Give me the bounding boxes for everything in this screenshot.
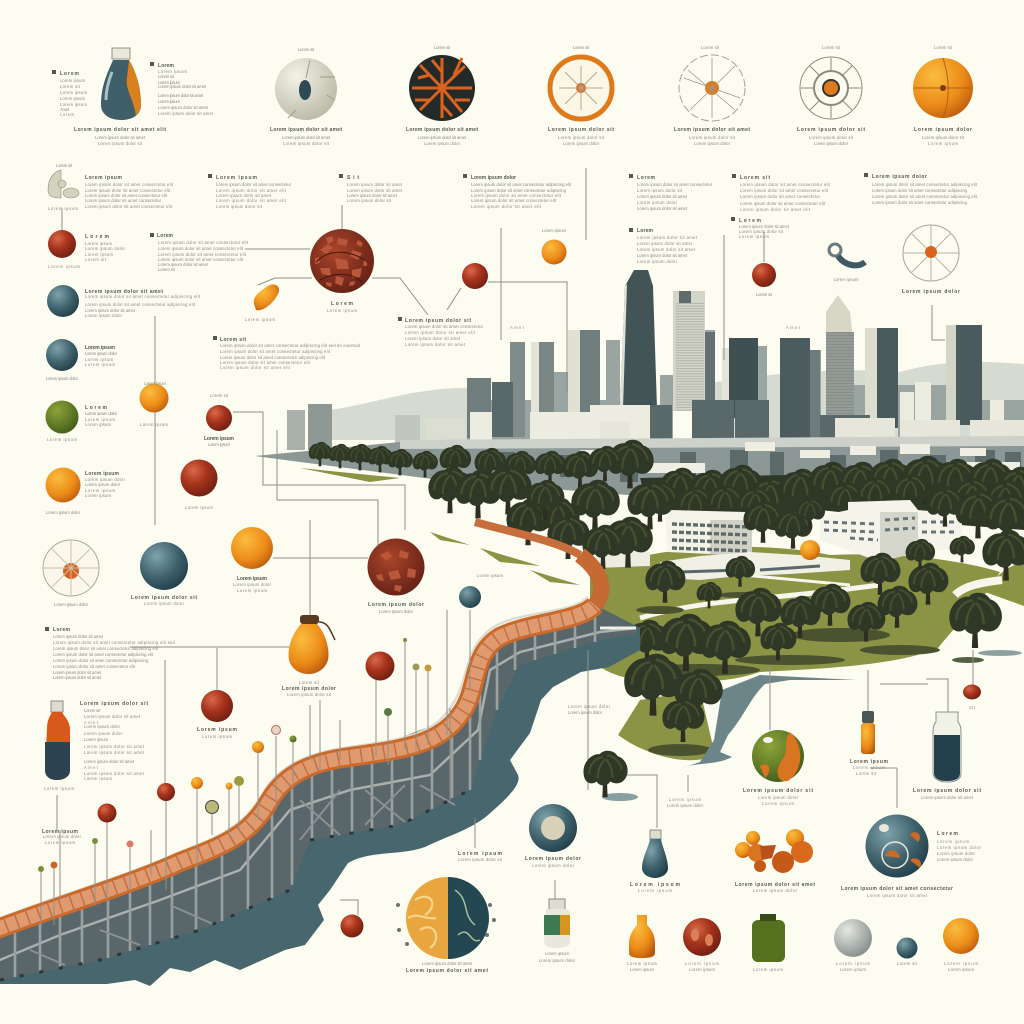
icon: fine line orbit diagram: [679, 55, 745, 121]
text blocks top row: Lorem sit: [822, 45, 841, 50]
rear tree band: [309, 440, 1024, 530]
white campus buildings: [596, 500, 962, 580]
icon: orange and navy test bottle: [45, 701, 70, 780]
text blocks left column: Lorem sit: [85, 257, 107, 262]
icon: pale cracked sphere: [275, 58, 337, 120]
text blocks second row: Lorem ipsum dolor: [471, 175, 516, 181]
text blocks second row: Lorem ipsum dolor sit amet elit: [740, 207, 811, 212]
text blocks second row: Lorem sit: [740, 175, 770, 181]
lawn: [300, 468, 1024, 760]
text blocks lower right: Lorem ipsum: [669, 797, 702, 802]
icon: organelle globe: [866, 814, 928, 878]
text blocks centre: Lorem ipsum dolor sit amet consectetur adipiscing elit sed do eiusmod: [220, 343, 361, 348]
distant hills: [330, 362, 1024, 440]
text blocks lower right: Lorem ipsum dolor sit: [458, 857, 503, 862]
text blocks centre: Lorem ipsum dolor: [379, 609, 414, 614]
icon: orange vial: [861, 711, 875, 754]
text blocks second row: Lorem ipsum dolor sit: [637, 188, 683, 193]
text blocks lower right: Lorem sit: [856, 771, 877, 776]
text blocks second row: Lorem: [637, 175, 656, 181]
text blocks top row: Lorem ipsum dolor sit amet: [674, 127, 750, 133]
text blocks top row: Lorem ipsum dolor sit amet: [158, 93, 204, 98]
text blocks lower right: Lorem ipsum dolor: [753, 888, 798, 893]
text blocks centre: Lorem ipsum: [197, 727, 238, 733]
text blocks left column: Lorem: [157, 233, 174, 239]
text blocks lower left: Lorem ipsum dolor sit amet: [84, 750, 145, 755]
text blocks second row: Lorem ipsum dolor sit amet: [637, 206, 688, 211]
text blocks lower right: Lorem ipsum dolor: [525, 856, 581, 862]
text blocks lower right: Lorem ipsum: [627, 961, 658, 966]
mid spheres: [140, 384, 481, 722]
icon: dark sphere with orange veins: [409, 55, 475, 121]
text blocks centre: [131, 228, 960, 739]
lawn paths and shadows: [636, 570, 1022, 768]
text blocks centre: Lorem ipsum dolor sit amet elit: [220, 365, 291, 370]
text blocks left column: [46, 233, 249, 607]
text blocks lower left: Lorem ipsum dolor: [43, 834, 82, 839]
icon: navy jar: [933, 712, 961, 782]
icon: orange ring diagram: [550, 57, 612, 119]
bridge trestle: [0, 605, 636, 985]
text blocks second row: Lorem ipsum dolor: [637, 259, 678, 264]
text blocks centre: Lorem ipsum dolor: [368, 602, 424, 608]
text blocks lower right: Lorem ipsum dolor: [937, 845, 982, 850]
text blocks lower right: Lorem ipsum dolor: [568, 710, 603, 715]
text blocks centre: Lorem ipsum dolor sit: [287, 692, 332, 697]
text blocks top row: Lorem ipsum dolor sit: [922, 135, 965, 140]
text blocks top row: [52, 45, 972, 146]
text blocks top row: Lorem ipsum dolor sit amet: [406, 127, 478, 133]
text blocks lower right: Lorem ipsum dolor sit amet: [735, 882, 815, 888]
text blocks centre: Lorem ipsum dolor sit: [405, 318, 471, 324]
text blocks top row: Lorem ipsum dolor sit amet: [158, 111, 214, 116]
text blocks centre: Lorem ipsum: [144, 381, 166, 386]
text blocks centre: Lorem ipsum: [237, 576, 268, 582]
text blocks centre: Lorem ipsum: [140, 422, 168, 427]
connector lines: [57, 168, 973, 915]
text blocks top row: Lorem ipsum: [60, 102, 88, 107]
text blocks second row: Lorem ipsum dolor sit amet: [637, 247, 696, 252]
text blocks lower left: Lorem: [53, 627, 71, 633]
text blocks second row: Lorem ipsum: [48, 206, 78, 211]
text blocks lower right: Lorem ipsum: [937, 839, 970, 844]
distant urban haze band: [255, 436, 1024, 496]
text blocks lower right: Lorem ipsum: [853, 765, 886, 770]
text blocks left column: Lorem ipsum dolor sit amet consectetur elit: [158, 252, 247, 257]
text blocks top row: Lorem ipsum dolor sit amet: [95, 135, 146, 140]
text blocks lower right: Lorem ipsum dolor sit amet: [921, 795, 974, 800]
text blocks lower left: Lorem ipsum dolor sit amet: [84, 771, 145, 776]
text blocks centre: Lorem ipsum dolor: [233, 582, 272, 587]
text blocks top row: Lorem ipsum dolor sit amet: [282, 135, 331, 140]
text blocks second row: Lorem ipsum dolor sit amet: [739, 224, 790, 229]
text blocks second row: Lorem ipsum dolor sit amet consectetur adipiscing: [872, 200, 968, 205]
text blocks lower left: Lorem sit: [84, 708, 101, 713]
text blocks left column: Lorem ipsum: [85, 362, 116, 367]
text blocks lower left: Lorem ipsum: [44, 786, 74, 791]
icon: teal flask: [642, 830, 668, 878]
text blocks second row: Lorem ipsum dolor sit amet consectetur elit: [85, 182, 174, 187]
text blocks second row: Lorem ipsum dolor sit amet consectetur adipiscing: [872, 188, 968, 193]
text blocks lower right: Lorem ipsum: [840, 967, 866, 972]
text blocks second row: Lorem ipsum dolor sit amet consectetur adipiscing elit: [872, 182, 978, 187]
text blocks left column: Lorem ipsum: [85, 345, 116, 351]
lower right spheres and nut: [340, 684, 981, 938]
text blocks left column: Lorem ipsum dolor: [54, 602, 89, 607]
text blocks top row: Lorem ipsum: [158, 99, 180, 104]
text blocks lower right: Lorem ipsum dolor: [539, 958, 576, 963]
text blocks left column: Lorem ipsum dolor sit amet: [158, 262, 209, 267]
text blocks lower left: Lorem ipsum dolor sit amet: [53, 634, 104, 639]
text blocks centre: Lorem ipsum: [208, 442, 230, 447]
text blocks lower left: Lorem ipsum dolor sit amet: [53, 675, 102, 680]
text blocks lower right: Lorem ipsum: [630, 967, 654, 972]
bottom row icons: [629, 914, 979, 962]
text blocks second row: Lorem ipsum dolor: [872, 174, 927, 180]
text blocks left column: Lorem ipsum dolor sit amet consectetur elit: [158, 257, 244, 262]
text blocks top row: Lorem ipsum: [158, 69, 188, 74]
text blocks lower left: Lorem ipsum dolor sit amet consectetur adipiscing elit sed: [53, 640, 176, 645]
text blocks top row: Lorem: [158, 63, 175, 69]
text blocks top row: Lorem ipsum dolor sit amet elit: [74, 127, 166, 133]
text blocks lower right: Lorem: [937, 831, 959, 837]
text blocks lower left: Lorem ipsum: [45, 840, 76, 845]
text blocks second row: Lorem ipsum dolor sit amet consectetur: [216, 182, 292, 187]
text blocks lower left: Lorem ipsum dolor sit amet consectetur adipiscing: [53, 658, 149, 663]
text blocks second row: Lorem ipsum dolor sit amet: [637, 241, 693, 246]
text blocks lower right: Lorem ipsum dolor: [667, 803, 704, 808]
text blocks left column: Lorem ipsum: [85, 422, 112, 427]
text blocks top row: Lorem ipsum: [60, 96, 86, 101]
text blocks centre: Lorem ipsum dolor sit amet: [405, 342, 466, 347]
text blocks top row: Lorem ipsum: [60, 78, 86, 83]
text blocks second row: Lorem ipsum dolor sit amet: [637, 235, 698, 240]
text blocks top row: Lorem: [60, 112, 74, 117]
text blocks lower right: [406, 704, 982, 974]
text blocks lower right: Lorem ipsum dolor sit amet consectetur: [841, 886, 953, 892]
text blocks centre: Lorem ipsum dolor sit amet elit: [405, 330, 476, 335]
text blocks second row: Lorem ipsum dolor sit amet consectetur elit: [740, 182, 831, 187]
text blocks top row: Lorem ipsum dolor sit: [283, 141, 330, 146]
text blocks left column: Lorem ipsum dolor: [85, 313, 123, 318]
text blocks centre: Lorem ipsum: [237, 588, 268, 593]
text blocks left column: Lorem ipsum dolor: [46, 376, 79, 381]
text blocks lower right: Lorem sit: [897, 961, 918, 966]
text blocks centre: Lorem ipsum: [202, 734, 232, 739]
text blocks lower right: Lorem ipsum dolor: [937, 851, 976, 856]
sphere column left: [43, 230, 99, 596]
text blocks top row: Lorem sit: [158, 74, 175, 79]
text blocks lower left: Lorem ipsum dolor sit amet consectetur elit: [53, 664, 136, 669]
text blocks top row: Lorem sit: [434, 45, 451, 50]
large textured brown sphere: [310, 229, 374, 293]
text blocks top row: Lorem ipsum dolor sit: [558, 135, 605, 140]
text blocks top row: Lorem ipsum: [928, 141, 958, 146]
text blocks left column: Lorem sit: [158, 267, 176, 272]
text blocks second row: Lorem ipsum dolor sit amet consectetur elit: [740, 201, 826, 206]
icon: chain link: [829, 244, 865, 265]
text blocks lower left: [42, 627, 176, 845]
text blocks top row: Lorem ipsum dolor sit: [797, 127, 865, 133]
text blocks lower left: Lorem ipsum: [84, 737, 108, 742]
text blocks second row: Sit: [347, 175, 359, 181]
text blocks centre: Lorem ipsum dolor sit amet: [405, 336, 461, 341]
text blocks centre: Lorem ipsum dolor: [144, 601, 185, 606]
text blocks lower right: Lorem ipsum dolor sit amet: [406, 968, 488, 974]
text blocks second row: Lorem ipsum dolor sit amet consectetur: [637, 182, 713, 187]
text blocks centre: Lorem ipsum: [542, 228, 566, 233]
text blocks centre: Lorem ipsum dolor sit amet consectetur adipiscing elit: [220, 355, 326, 360]
icon: green pill jar: [544, 899, 570, 948]
text blocks centre: Lorem ipsum: [327, 308, 358, 313]
text blocks second row: Lorem ipsum dolor sit amet: [347, 188, 403, 193]
text blocks lower left: Lorem ipsum: [42, 829, 79, 835]
text blocks lower right: Lorem ipsum: [850, 759, 889, 765]
text blocks second row: Lorem sit: [56, 163, 73, 168]
text blocks second row: Lorem ipsum dolor sit amet: [347, 182, 403, 187]
text blocks centre: Lorem ipsum dolor sit amet consectetur: [405, 324, 484, 329]
text blocks lower right: Lorem ipsum: [948, 967, 974, 972]
text blocks top row: Lorem ipsum dolor sit amet: [418, 135, 467, 140]
text blocks top row: Lorem sit: [60, 84, 81, 89]
text blocks lower left: Lorem ipsum dolor sit amet: [53, 670, 102, 675]
text blocks centre: Lorem ipsum dolor: [282, 686, 336, 692]
text blocks left column: Lorem ipsum: [85, 471, 120, 477]
text blocks top row: Lorem ipsum dolor: [563, 141, 600, 146]
text blocks lower right: Lorem ipsum dolor sit: [743, 788, 813, 794]
text blocks lower right: Sit: [969, 705, 976, 710]
text blocks top row: Amet: [60, 107, 70, 112]
text blocks second row: Lorem ipsum dolor sit amet: [347, 193, 398, 198]
text blocks left column: Lorem ipsum dolor: [46, 510, 81, 515]
text blocks second row: Lorem ipsum dolor sit amet elit: [216, 188, 287, 193]
text blocks left column: Lorem ipsum: [47, 437, 78, 442]
text blocks centre: Lorem sit: [210, 393, 229, 398]
text blocks top row: Lorem ipsum dolor: [424, 141, 461, 146]
text blocks lower left: Lorem ipsum dolor sit amet consectetur adipiscing elit: [53, 646, 159, 651]
text blocks left column: Lorem: [85, 405, 108, 411]
text blocks lower right: Lorem ipsum dolor: [568, 704, 611, 709]
text blocks top row: Lorem ipsum dolor sit: [548, 127, 614, 133]
icon: orange fruit cluster: [735, 829, 813, 873]
text blocks second row: Lorem ipsum dolor sit amet consectetur elit: [85, 193, 168, 198]
text blocks left column: Lorem ipsum dolor sit amet consectetur elit: [158, 246, 244, 251]
text blocks left column: Lorem ipsum dolor sit amet consectetur adipiscing elit: [85, 294, 201, 299]
text blocks centre: Lorem ipsum: [204, 436, 235, 442]
city skyline: [287, 270, 1024, 450]
text blocks second row: Lorem ipsum dolor sit amet consectetur: [740, 194, 821, 199]
text blocks centre: Lorem: [331, 301, 354, 307]
text blocks top row: Lorem ipsum dolor sit: [98, 141, 143, 146]
text blocks centre: Lorem ipsum: [477, 573, 504, 578]
text blocks lower right: Lorem ipsum dolor: [532, 863, 575, 868]
text blocks centre: Lorem ipsum dolor sit: [131, 595, 197, 601]
text blocks centre: Lorem ipsum dolor sit amet consectetur adipiscing elit: [220, 349, 331, 354]
text blocks centre: Lorem ipsum dolor sit amet consectetur elit: [220, 360, 311, 365]
text blocks lower right: Lorem ipsum: [944, 961, 978, 966]
text blocks top row: Lorem ipsum dolor sit: [809, 135, 854, 140]
text blocks lower right: Lorem ipsum dolor sit: [913, 788, 981, 794]
pins along the walkway: [38, 638, 432, 930]
text blocks left column: Lorem ipsum dolor: [85, 246, 126, 251]
text blocks second row: Lorem ipsum: [85, 175, 123, 181]
text blocks second row: Lorem ipsum dolor sit amet consectetur adipiscing: [471, 188, 567, 193]
text blocks lower left: Lorem ipsum dolor: [84, 731, 123, 736]
text blocks left column: Lorem: [85, 234, 110, 240]
text blocks second row: Lorem ipsum dolor sit: [739, 229, 784, 234]
text blocks top row: Lorem ipsum dolor sit amet: [158, 105, 209, 110]
text blocks lower right: Lorem ipsum: [753, 967, 784, 972]
text blocks lower left: Lorem ipsum dolor sit amet: [84, 714, 141, 719]
text blocks lower right: Lorem ipsum: [685, 961, 720, 966]
text blocks lower left: Lorem ipsum dolor sit amet: [84, 759, 135, 764]
text blocks top row: Lorem ipsum: [158, 80, 180, 85]
text blocks left column: Lorem ipsum dolor: [85, 482, 121, 487]
text blocks lower left: Lorem ipsum dolor sit: [80, 701, 148, 707]
icon: orange sphere: [913, 58, 973, 118]
icon: wheel diagram: [903, 225, 959, 281]
half orange half teal globe: [396, 877, 496, 959]
text blocks top row: Lorem sit: [298, 47, 315, 52]
text blocks centre: Lorem ipsum: [245, 317, 276, 322]
text blocks top row: Lorem ipsum dolor sit amet: [270, 127, 342, 133]
icon: teal and orange bottle: [101, 48, 141, 120]
text blocks second row: Lorem ipsum dolor sit amet consectetur elit: [471, 198, 557, 203]
text blocks lower left: Lorem ipsum dolor: [84, 724, 121, 729]
text blocks centre: Lorem ipsum: [834, 277, 859, 282]
text blocks left column: Lorem ipsum: [48, 264, 80, 269]
text blocks top row: Lorem: [60, 71, 80, 77]
icon: green and orange sphere: [752, 730, 804, 782]
text blocks second row: Lorem ipsum dolor sit: [347, 198, 392, 203]
text blocks second row: Lorem ipsum dolor sit amet: [637, 194, 688, 199]
text blocks second row: Lorem ipsum dolor: [637, 200, 678, 205]
text blocks top row: Lorem ipsum dolor sit amet: [158, 84, 207, 89]
text blocks second row: Lorem ipsum dolor sit amet consectetur elit: [740, 188, 829, 193]
text blocks centre: Lorem sit: [299, 680, 320, 685]
tree groves: [428, 466, 1024, 742]
text blocks lower right: Lorem ipsum dolor sit amet: [867, 893, 928, 898]
text blocks left column: Lorem ipsum dolor sit amet consectetur elit: [158, 240, 249, 245]
text blocks second row: Lorem ipsum dolor sit amet consectetur elit: [85, 188, 171, 193]
text blocks second row: Lorem ipsum dolor sit amet consectetur adipiscing elit: [471, 182, 572, 187]
text blocks centre: Lorem ipsum: [185, 505, 214, 510]
text blocks top row: Lorem ipsum: [60, 90, 88, 95]
text blocks left column: Lorem ipsum dolor sit amet: [85, 289, 163, 295]
text blocks second row: Lorem ipsum: [739, 234, 770, 239]
text blocks second row: Lorem ipsum dolor sit amet elit: [216, 198, 287, 203]
text blocks lower right: Lorem ipsum: [545, 951, 570, 956]
text blocks left column: Lorem ipsum dolor sit amet consectetur adipiscing elit: [85, 302, 196, 307]
text blocks left column: Lorem ipsum: [85, 357, 114, 362]
bridge walkway: [0, 522, 601, 930]
text blocks second row: Lorem ipsum dolor sit amet consectetur elit: [471, 193, 562, 198]
text blocks second row: Lorem ipsum dolor sit: [216, 204, 263, 209]
text blocks left column: Lorem ipsum dolor: [85, 411, 118, 416]
text blocks second row: Lorem: [637, 228, 654, 234]
text blocks centre: Amet: [510, 325, 525, 330]
text blocks lower left: Lorem ipsum dolor sit amet consectetur adipiscing elit: [53, 652, 154, 657]
text blocks lower right: Lorem ipsum dolor: [937, 857, 974, 862]
text blocks lower right: Lorem ipsum dolor: [758, 795, 799, 800]
text blocks second row: [48, 163, 978, 264]
text blocks lower right: Lorem ipsum: [638, 888, 672, 893]
text blocks left column: Lorem ipsum dolor: [85, 477, 126, 482]
text blocks second row: Lorem ipsum dolor sit amet: [216, 193, 272, 198]
icon: orange gourd flask: [289, 615, 335, 674]
text blocks left column: Lorem ipsum dolor: [85, 351, 118, 356]
text blocks centre: Lorem sit: [756, 292, 773, 297]
text blocks top row: Lorem ipsum dolor sit: [689, 135, 736, 140]
text blocks second row: Lorem: [739, 218, 762, 224]
text blocks lower right: Lorem ipsum dolor sit amet: [422, 961, 473, 966]
text blocks left column: Lorem ipsum: [85, 493, 112, 498]
text blocks second row: Lorem ipsum dolor sit amet consectetur: [85, 198, 162, 203]
isolated tree: [583, 751, 638, 801]
text blocks lower right: Lorem ipsum: [689, 967, 716, 972]
text blocks second row: Lorem ipsum dolor sit amet elit: [471, 204, 542, 209]
text blocks left column: Lorem ipsum: [85, 488, 116, 493]
text blocks lower left: Amet: [84, 720, 99, 725]
text blocks top row: Lorem sit: [573, 45, 590, 50]
text blocks lower right: Lorem ipsum: [630, 882, 681, 888]
text blocks top row: Lorem sit: [934, 45, 953, 50]
text blocks centre: Lorem sit: [220, 337, 246, 343]
river: [0, 605, 640, 986]
text blocks lower right: Lorem ipsum: [458, 851, 503, 857]
text blocks lower right: Lorem ipsum: [762, 801, 794, 806]
text blocks second row: Lorem ipsum dolor sit amet consectetur elit: [85, 204, 173, 209]
text blocks centre: Lorem ipsum dolor: [902, 289, 960, 295]
text blocks lower left: Amet: [84, 765, 99, 770]
text blocks top row: Lorem ipsum dolor: [914, 127, 972, 133]
text blocks second row: Lorem ipsum: [216, 175, 258, 181]
text blocks left column: Lorem ipsum dolor sit amet: [85, 308, 136, 313]
text blocks left column: Lorem ipsum: [85, 241, 112, 246]
text blocks top row: Lorem ipsum dolor: [694, 141, 731, 146]
text blocks top row: Lorem sit: [701, 45, 720, 50]
text blocks left column: Lorem ipsum: [85, 417, 116, 422]
text blocks second row: Lorem ipsum dolor sit amet: [637, 253, 688, 258]
icon: pale seeds: [48, 170, 79, 198]
text blocks lower right: Lorem ipsum: [836, 961, 870, 966]
small spheres and capsule upper: [254, 240, 776, 310]
icon: line circle with orange core: [800, 57, 862, 119]
text blocks left column: Lorem ipsum: [85, 252, 114, 257]
text blocks second row: Lorem ipsum dolor sit amet consectetur adipiscing elit: [872, 194, 978, 199]
text blocks centre: Amet: [786, 325, 801, 330]
text blocks lower left: Lorem ipsum dolor sit amet: [84, 744, 145, 749]
text blocks lower left: Lorem ipsum: [84, 776, 112, 781]
text blocks top row: Lorem ipsum dolor: [814, 141, 849, 146]
